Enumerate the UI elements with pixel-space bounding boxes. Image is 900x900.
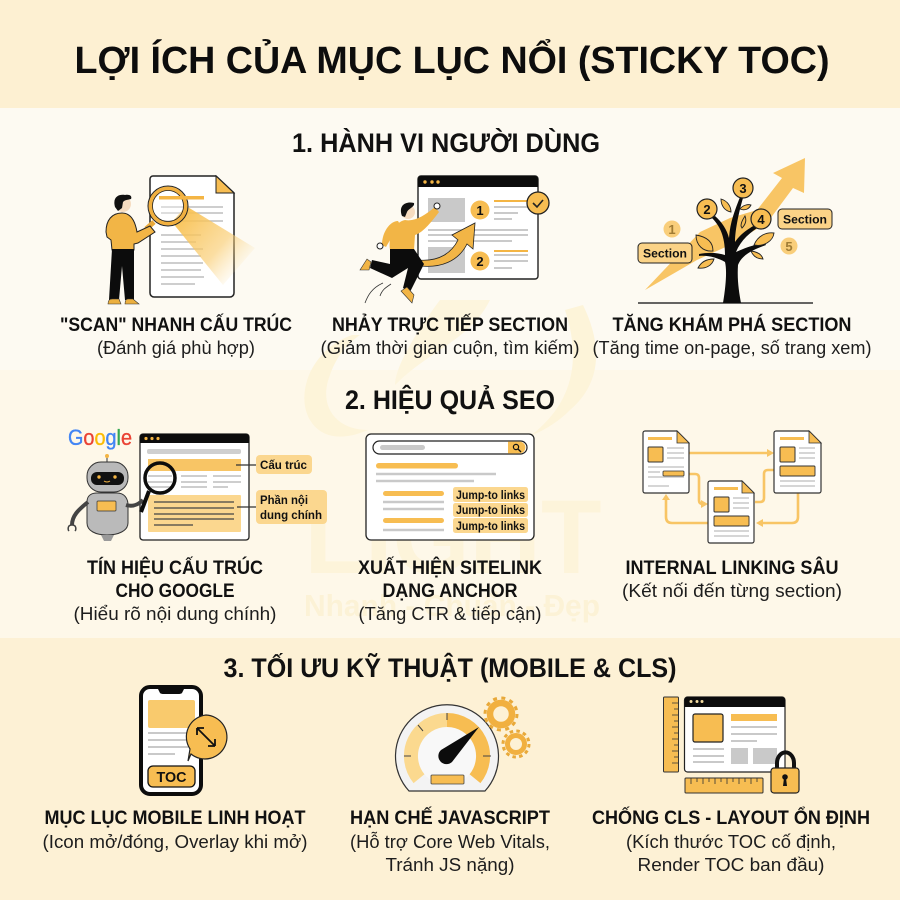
icon: speed gauge with gears [395,698,529,791]
label: jump to section: NHẢY TRỰC TIẾP SECTION [332,314,568,336]
icon: Google robot inspecting page: Phần nội [260,495,308,507]
label: anti CLS: Render TOC ban đầu) [638,855,824,875]
label: structure signal: (Hiểu rõ nội dung chính) [74,604,276,624]
label: sitelink [358,557,542,624]
icon: search result with jump-to links: Jump-to links [456,490,525,502]
label: anti CLS [592,807,870,875]
icon: search result with jump-to links: Jump-to links [456,505,525,517]
icon: Google robot inspecting page: Cấu trúc [260,460,308,472]
label: mobile TOC [42,808,308,852]
icon: jumping person and page [360,176,549,303]
icon: jumping person and page: 2 [476,254,484,269]
label: sitelink: (Tăng CTR & tiếp cận) [358,604,542,624]
title: LỢI ÍCH CỦA MỤC LỤC NỔI (STICKY TOC) [74,37,830,82]
icon: growth tree: 3 [739,181,747,196]
icon: growth tree: 5 [785,239,793,254]
heading: section 2: 2. HIỆU QUẢ SEO [345,383,555,415]
label: internal linking: (Kết nối đến từng section) [622,581,842,601]
label: anti CLS: (Kích thước TOC cố định, [626,832,836,852]
icon: stable layout with rulers and lock [664,697,799,793]
watermark logo: LIGHT [304,479,602,596]
label: discover sections [592,314,872,358]
label: internal linking: INTERNAL LINKING SÂU [626,557,838,579]
label: limit JavaScript: (Hỗ trợ Core Web Vitals, [350,831,550,852]
icon: search result with jump-to links: Jump-to links [456,521,525,533]
icon: Google robot inspecting page: Google [68,425,132,450]
watermark logo: Nhanh - Chuẩn - Đẹp [304,588,600,623]
icon: growth tree [638,158,832,303]
label: discover sections: (Tăng time on-page, số trang xem) [592,338,872,358]
label: anti CLS: CHỐNG CLS - LAYOUT ỔN ĐỊNH [592,807,870,829]
label: discover sections: TĂNG KHÁM PHÁ SECTION [612,314,852,336]
heading: section 3: 3. TỐI ƯU KỸ THUẬT (MOBILE & CLS) [224,651,676,683]
icon: growth tree: Section [783,214,827,226]
icon: Google robot inspecting page: dung chính [260,510,322,522]
icon: Google robot inspecting page [68,425,327,541]
label: limit JavaScript [350,807,550,875]
label: sitelink: DẠNG ANCHOR [382,581,518,602]
label: structure signal: CHO GOOGLE [116,581,234,602]
icon: mobile TOC [141,687,227,794]
label: jump to section [320,314,580,358]
label: limit JavaScript: HẠN CHẾ JAVASCRIPT [350,807,550,829]
icon: growth tree: 2 [703,202,711,217]
label: jump to section: (Giảm thời gian cuộn, tìm kiếm) [320,338,580,358]
icon: growth tree: 1 [668,222,676,237]
label: scan: "SCAN" NHANH CẤU TRÚC [60,314,292,336]
label: sitelink: XUẤT HIỆN SITELINK [358,557,542,579]
icon: growth tree: Section [643,248,687,260]
icon: search result with jump-to links [366,434,534,540]
icon: growth tree: 4 [757,212,765,227]
icon: internal linking documents [643,431,821,543]
label: structure signal [74,557,276,624]
icon: mobile TOC: TOC [156,770,187,786]
label: scan [60,314,292,358]
label: mobile TOC: (Icon mở/đóng, Overlay khi mở) [42,832,308,852]
label: scan: (Đánh giá phù hợp) [97,338,255,358]
heading: section 1: 1. HÀNH VI NGƯỜI DÙNG [292,127,600,158]
label: limit JavaScript: Tránh JS nặng) [386,855,514,875]
label: structure signal: TÍN HIỆU CẤU TRÚC [87,557,263,579]
watermark logo [304,300,602,623]
icon: person scanning document [106,176,255,304]
label: internal linking [622,557,842,601]
label: mobile TOC: MỤC LỤC MOBILE LINH HOẠT [44,808,306,829]
icon: jumping person and page: 1 [476,203,484,218]
